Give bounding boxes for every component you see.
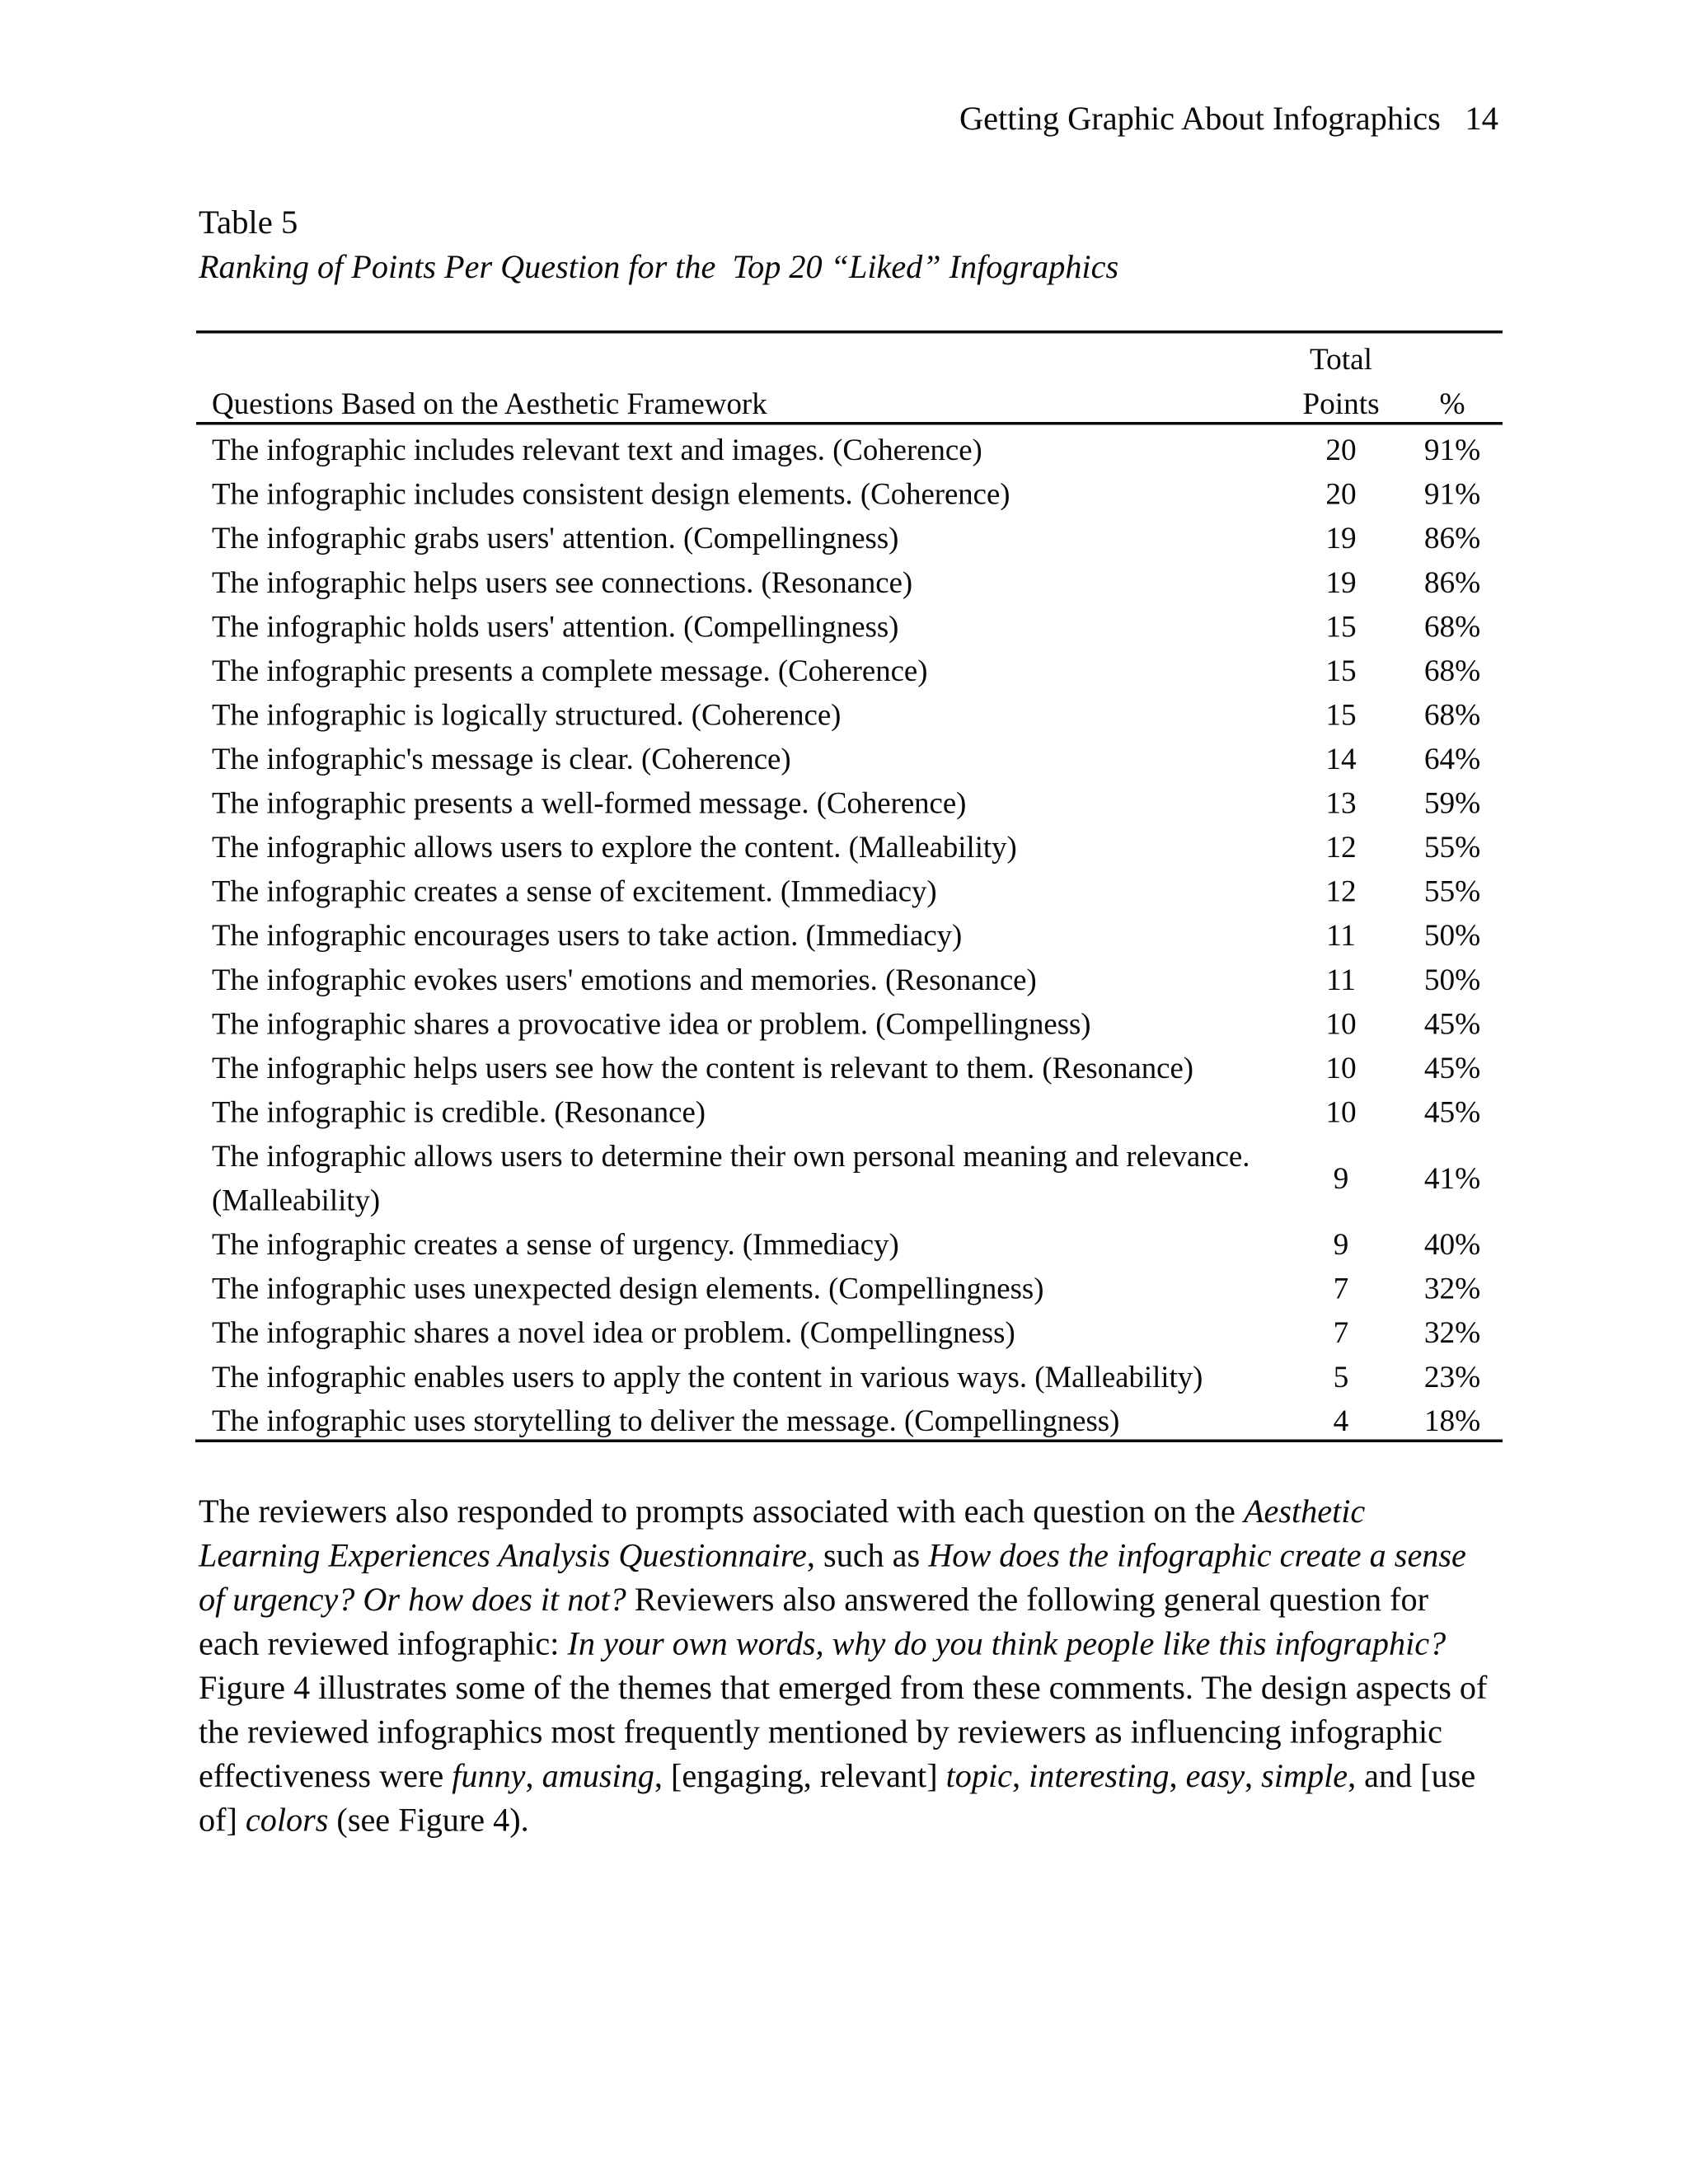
table rows: The infographic creates a sense of excitement. (Immediacy) [212,874,937,909]
table rows: The infographic presents a well-formed message. (Coherence) [212,786,966,821]
table rows: 13 [1325,787,1357,821]
table rows: The infographic shares a provocative idea or problem. (Compellingness) [212,1007,1091,1041]
table rows: The infographic allows users to explore the content. (Malleability) [212,831,1017,865]
column headers: Points [1302,387,1380,421]
body paragraph: Learning Experiences Analysis Questionnaire, such as How does the infographic create a sense [198,1536,1466,1574]
table rows: 19 [1325,566,1357,600]
column headers [212,343,1465,421]
table rows: (Malleability) [212,1183,380,1218]
running header: 14 [1465,100,1498,137]
table rows: 12 [1325,831,1357,865]
table title: Table 5 [199,204,298,241]
table rows: 68% [1424,610,1480,644]
table rows: The infographic uses storytelling to deliver the message. (Compellingness) [212,1404,1119,1438]
table rows: The infographic's message is clear. (Coherence) [212,743,791,776]
table rows: 32% [1424,1316,1480,1350]
table rows: 91% [1424,478,1480,512]
table rows: 10 [1325,1007,1357,1041]
table rows: 23% [1424,1361,1480,1394]
table rows: The infographic is logically structured. (Coherence) [212,698,841,733]
table rows: 50% [1424,963,1480,997]
table rows: 9 [1334,1228,1348,1262]
table title [198,204,1118,285]
table rows: 14 [1325,743,1357,776]
table rows: 12 [1325,875,1357,909]
table rows: The infographic allows users to determine their own personal meaning and relevance. [212,1140,1250,1174]
table rows: 11 [1326,919,1356,953]
table rows: 4 [1334,1404,1349,1438]
table rows: 9 [1334,1162,1348,1196]
body paragraph: each reviewed infographic: In your own words, why do you think people like this infographic? [199,1624,1446,1662]
table rows: 64% [1424,743,1480,776]
table rows: The infographic includes consistent design elements. (Coherence) [212,477,1010,512]
table rows: 7 [1334,1316,1348,1350]
running header: Getting Graphic About Infographics [959,100,1441,137]
table rows: The infographic shares a novel idea or problem. (Compellingness) [212,1316,1015,1350]
column headers: % [1439,387,1465,421]
table rows: 15 [1325,698,1357,732]
table rows: 45% [1424,1096,1480,1130]
table rows: The infographic evokes users' emotions and memories. (Resonance) [212,963,1037,997]
table rows: The infographic holds users' attention. (Compellingness) [212,610,898,644]
table rows: The infographic helps users see how the content is relevant to them. (Resonance) [212,1052,1193,1085]
table rows: 68% [1424,654,1480,688]
table rows: 41% [1424,1162,1480,1196]
table [195,330,1503,1442]
table rows: 50% [1424,919,1480,953]
table rows: 11 [1326,963,1356,997]
table rows: The infographic encourages users to take action. (Immediacy) [212,919,962,953]
body paragraph: effectiveness were funny, amusing, [engaging, relevant] topic, interesting, easy, simple, and [use [199,1757,1475,1794]
table rows: 32% [1424,1272,1480,1306]
table rows: The infographic helps users see connections. (Resonance) [212,566,912,600]
table rows: 45% [1424,1052,1480,1085]
table rows: 45% [1424,1007,1480,1041]
table rows: 10 [1325,1052,1357,1085]
table rows: The infographic creates a sense of urgency. (Immediacy) [212,1228,899,1262]
column headers: Total [1310,343,1372,377]
table rows: 10 [1325,1096,1357,1130]
table rows: 91% [1424,434,1480,467]
body paragraph: the reviewed infographics most frequently mentioned by reviewers as influencing infographic [199,1713,1442,1750]
table rows: 15 [1325,610,1357,644]
table rows: 15 [1325,654,1357,688]
table rows: 55% [1424,875,1480,909]
table rows: The infographic is credible. (Resonance) [212,1095,706,1130]
body paragraph: of] colors (see Figure 4). [199,1801,529,1839]
column headers: Questions Based on the Aesthetic Framework [212,387,767,421]
table rows: 5 [1334,1361,1348,1394]
body paragraph [198,1493,1488,1839]
table rows: The infographic presents a complete message. (Coherence) [212,654,927,688]
body paragraph: The reviewers also responded to prompts associated with each question on the Aesthetic [199,1493,1365,1530]
table rows: 7 [1334,1272,1348,1306]
table rows: 19 [1325,522,1357,555]
table title: Ranking of Points Per Question for the Top 20 “Liked” Infographics [198,248,1118,285]
table rows: 40% [1424,1228,1480,1262]
table rows: 18% [1424,1404,1480,1438]
table rows: The infographic uses unexpected design elements. (Compellingness) [212,1272,1043,1306]
table rows: 20 [1325,478,1357,512]
body paragraph: Figure 4 illustrates some of the themes that emerged from these comments. The design aspects of [199,1669,1488,1706]
table rows: The infographic enables users to apply the content in various ways. (Malleability) [212,1361,1203,1394]
table rows: 86% [1424,566,1480,600]
table rows: 55% [1424,831,1480,865]
body paragraph: of urgency? Or how does it not? Reviewers also answered the following general question for [199,1581,1429,1618]
table rows: The infographic grabs users' attention. (Compellingness) [212,522,898,555]
table rows: 59% [1424,787,1480,821]
table rows: 20 [1325,434,1357,467]
table rows [212,434,1480,1438]
table rows: 86% [1424,522,1480,555]
table rows: The infographic includes relevant text and images. (Coherence) [212,434,982,467]
table rows: 68% [1424,698,1480,732]
